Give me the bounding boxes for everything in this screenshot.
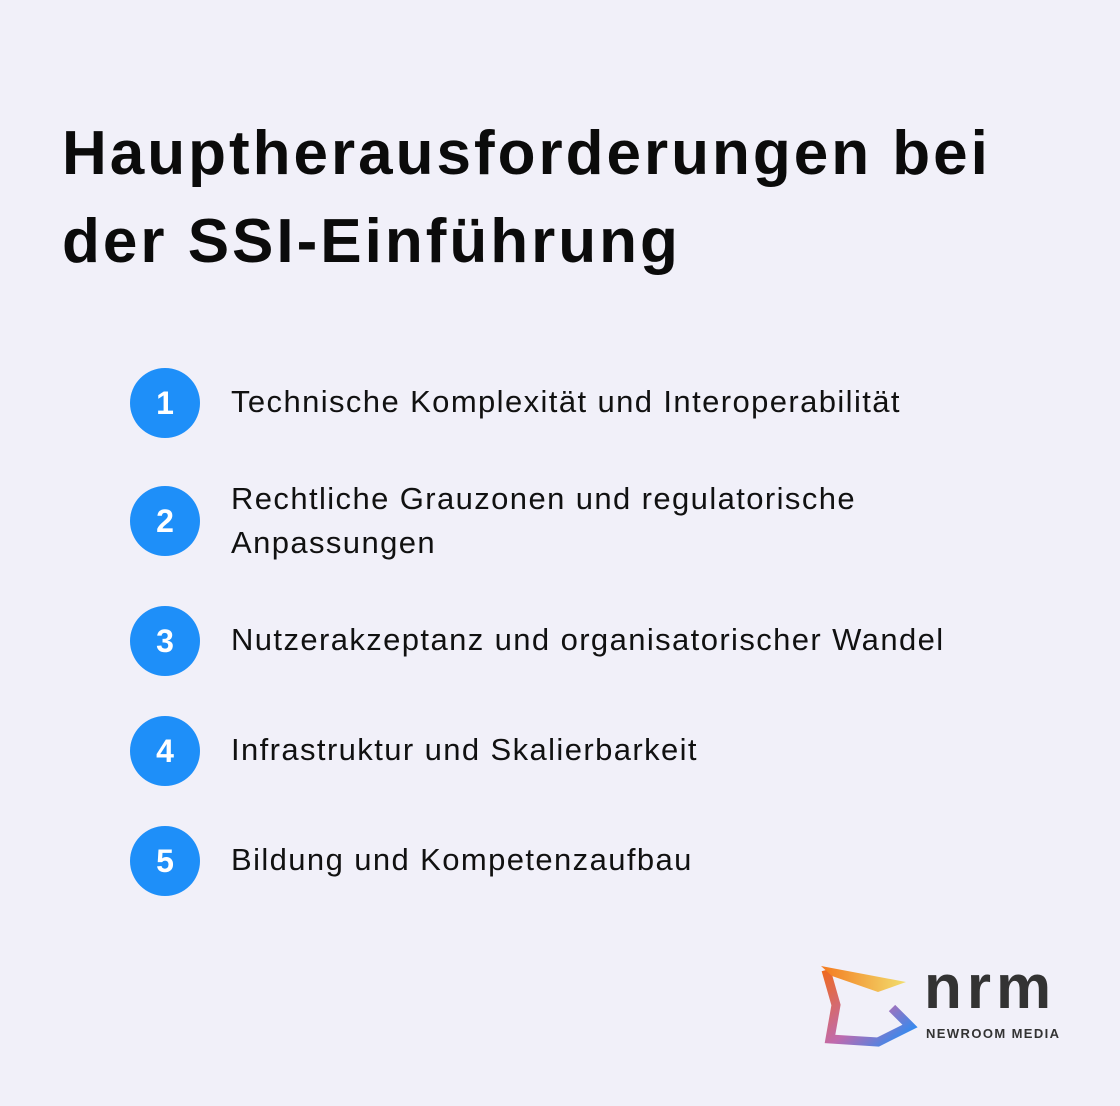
item 1 — [130, 368, 901, 438]
item 1: 1 — [156, 385, 174, 421]
logo — [821, 953, 1060, 1047]
item 4: 4 — [156, 733, 174, 769]
item 5 — [130, 826, 693, 896]
item 1: Technische Komplexität und Interoperabilität — [231, 384, 901, 419]
logo: NEWROOM MEDIA — [926, 1026, 1060, 1041]
item 3: 3 — [156, 623, 174, 659]
item 3: Nutzerakzeptanz und organisatorischer Wandel — [231, 622, 945, 657]
logo text: nrm — [924, 953, 1056, 1022]
item 4: Infrastruktur und Skalierbarkeit — [231, 732, 698, 767]
icon: logo mark — [821, 966, 918, 1047]
item 5: Bildung und Kompetenzaufbau — [231, 842, 693, 877]
item 5: 5 — [156, 843, 174, 879]
title: der SSI-Einführung — [62, 207, 681, 276]
title — [62, 119, 991, 276]
item 3 — [130, 606, 945, 676]
item 2: Anpassungen — [231, 525, 436, 560]
item 2: 2 — [156, 503, 174, 539]
item 2: Rechtliche Grauzonen und regulatorische — [231, 481, 856, 516]
item 2 — [130, 481, 856, 560]
title: Hauptherausforderungen bei — [62, 119, 991, 188]
item 4 — [130, 716, 698, 786]
